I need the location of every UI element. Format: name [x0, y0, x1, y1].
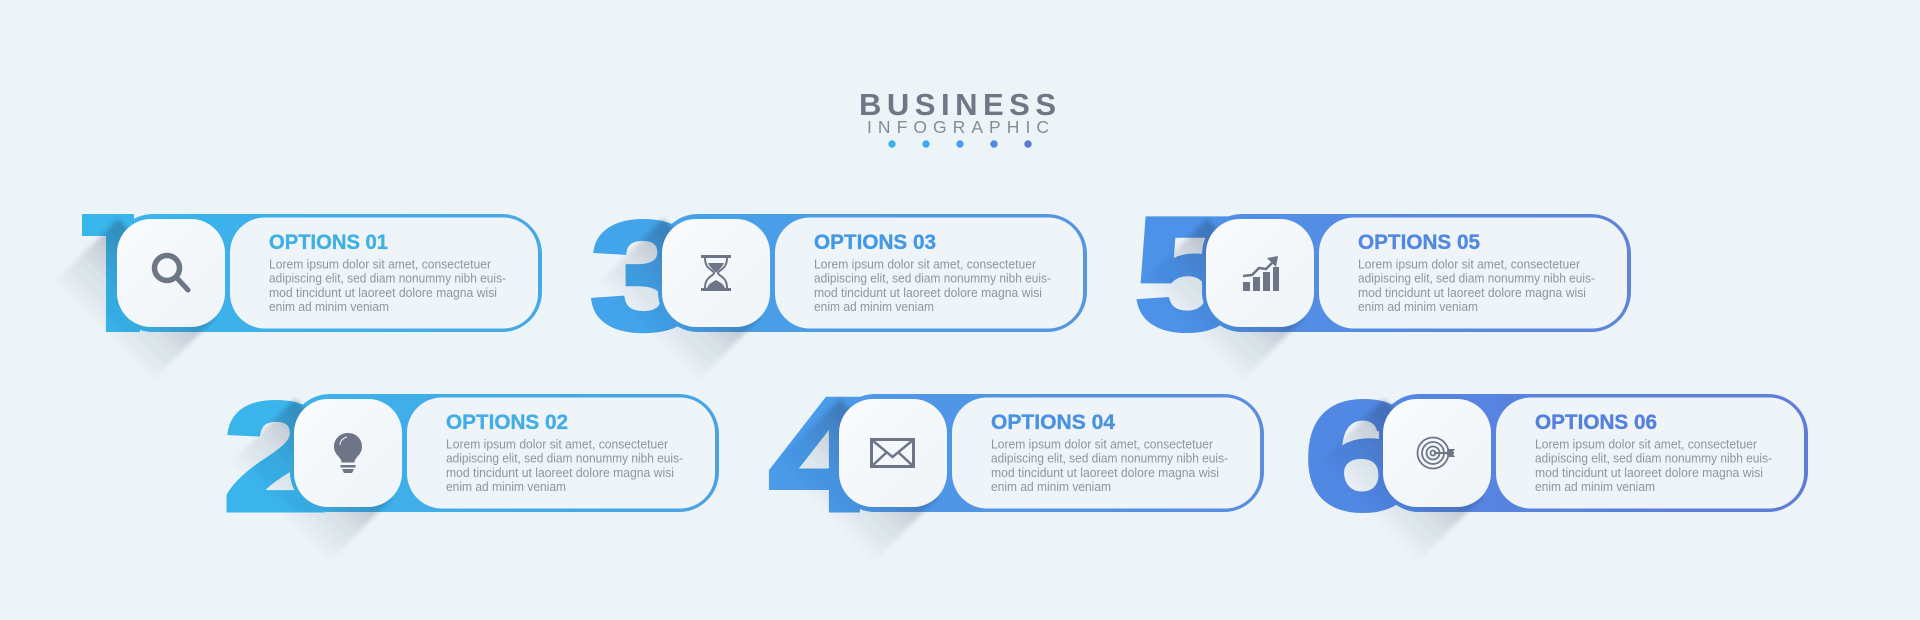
option heading: OPTIONS 02	[446, 411, 568, 434]
colored bar	[835, 394, 1264, 512]
option body text: adipiscing elit, sed diam nonummy nibh euis-	[446, 451, 683, 466]
icon: light bulb	[334, 433, 362, 473]
option body text: Lorem ipsum dolor sit amet, consectetuer	[446, 436, 669, 452]
number 1: 1	[73, 193, 159, 365]
option body text: mod tincidunt ut laoreet dolore magna wisi	[991, 465, 1219, 480]
icon: growth chart	[1243, 256, 1279, 291]
subheading: infographic: INFOGRAPHIC	[867, 117, 1049, 137]
option body text: enim ad minim veniam	[991, 479, 1111, 494]
icon tile	[1383, 399, 1491, 507]
icon: magnifier	[154, 256, 188, 290]
number 6: 6	[1304, 371, 1417, 542]
option body text	[269, 256, 506, 314]
option body text: adipiscing elit, sed diam nonummy nibh euis-	[1358, 271, 1595, 286]
option body text: enim ad minim veniam	[1358, 299, 1478, 314]
number 4: 4	[769, 365, 876, 545]
text panel	[230, 218, 538, 328]
long shadow	[599, 219, 760, 382]
option body text: adipiscing elit, sed diam nonummy nibh euis-	[269, 271, 506, 286]
text panel	[1319, 218, 1627, 328]
long shadow	[54, 219, 215, 382]
colored bar	[1202, 214, 1631, 332]
option body text	[1535, 436, 1772, 494]
option body text: mod tincidunt ut laoreet dolore magna wisi	[1535, 465, 1763, 480]
long shadow	[1320, 399, 1481, 562]
option body text: mod tincidunt ut laoreet dolore magna wisi	[446, 465, 674, 480]
card: options 01	[65, 214, 542, 370]
title block	[859, 87, 1056, 148]
option body text	[814, 256, 1051, 314]
option body text: Lorem ipsum dolor sit amet, consectetuer	[1535, 436, 1758, 452]
icon tile	[117, 219, 225, 327]
text panel	[952, 398, 1260, 508]
icon tile	[1206, 219, 1314, 327]
option body text: adipiscing elit, sed diam nonummy nibh euis-	[991, 451, 1228, 466]
colored bar	[1379, 394, 1808, 512]
option body text	[1358, 256, 1595, 314]
number 2: 2	[223, 371, 329, 543]
colored bar	[113, 214, 542, 332]
option body text	[446, 436, 683, 494]
number 5: 5	[1134, 184, 1242, 363]
card: options 03	[590, 190, 1087, 382]
icon tile	[662, 219, 770, 327]
option body text: mod tincidunt ut laoreet dolore magna wisi	[1358, 285, 1586, 300]
option heading: OPTIONS 01	[269, 231, 388, 254]
option body text	[991, 436, 1228, 494]
icon tile	[839, 399, 947, 507]
decorative dot row	[888, 140, 1032, 148]
long shadow	[1143, 219, 1304, 382]
option body text: enim ad minim veniam	[814, 299, 934, 314]
option heading: OPTIONS 03	[814, 231, 936, 254]
icon: hourglass	[701, 255, 731, 291]
text panel	[407, 398, 715, 508]
number 1	[82, 214, 140, 332]
heading: business: BUSINESS	[859, 87, 1056, 122]
option body text: Lorem ipsum dolor sit amet, consectetuer	[1358, 256, 1581, 272]
option body text: mod tincidunt ut laoreet dolore magna wisi	[814, 285, 1042, 300]
option heading: OPTIONS 04	[991, 411, 1115, 434]
option body text: Lorem ipsum dolor sit amet, consectetuer	[269, 256, 492, 272]
card: options 02	[223, 371, 719, 562]
text panel	[775, 218, 1083, 328]
icon: envelope	[872, 440, 914, 466]
option body text: enim ad minim veniam	[1535, 479, 1655, 494]
icon tile	[294, 399, 402, 507]
option body text: enim ad minim veniam	[269, 299, 389, 314]
card: options 06	[1304, 371, 1808, 562]
icon: target	[1418, 438, 1455, 468]
option heading: OPTIONS 06	[1535, 411, 1657, 434]
option body text: Lorem ipsum dolor sit amet, consectetuer	[814, 256, 1037, 272]
long shadow	[231, 399, 392, 562]
option body text: Lorem ipsum dolor sit amet, consectetuer	[991, 436, 1214, 452]
number 3: 3	[590, 190, 698, 362]
colored bar	[658, 214, 1087, 332]
option heading: OPTIONS 05	[1358, 231, 1480, 254]
card: options 04	[769, 365, 1264, 562]
option body text: mod tincidunt ut laoreet dolore magna wisi	[269, 285, 497, 300]
long shadow	[776, 399, 937, 562]
card: options 05	[1134, 184, 1631, 382]
text panel	[1496, 398, 1804, 508]
option body text: enim ad minim veniam	[446, 479, 566, 494]
colored bar	[290, 394, 719, 512]
option body text: adipiscing elit, sed diam nonummy nibh euis-	[814, 271, 1051, 286]
option body text: adipiscing elit, sed diam nonummy nibh euis-	[1535, 451, 1772, 466]
